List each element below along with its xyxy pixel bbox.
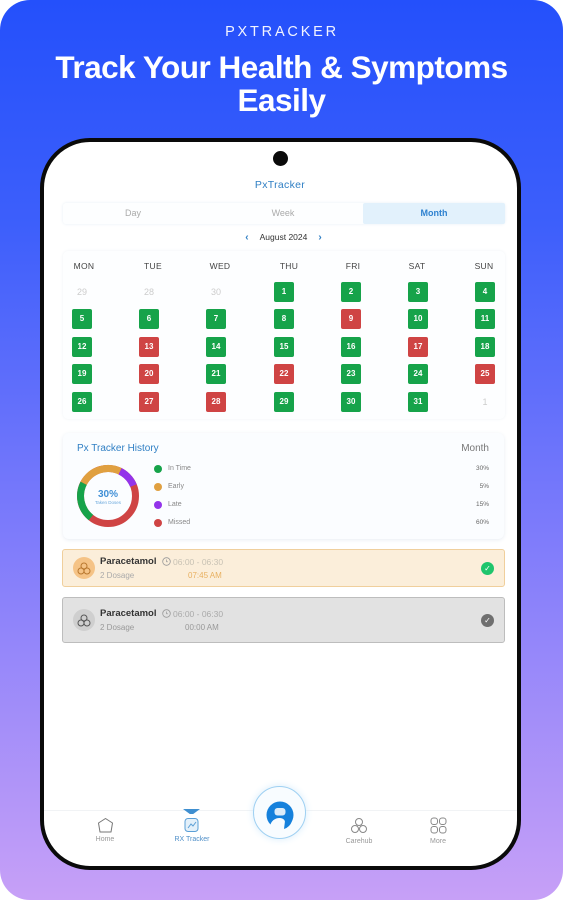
calendar days: 26 xyxy=(78,397,86,406)
nav: assistant button xyxy=(253,786,306,839)
calendar days: 21 xyxy=(212,369,220,378)
robot icon xyxy=(266,802,294,829)
calendar days: 28 xyxy=(144,287,154,297)
active tab highlight xyxy=(363,203,505,224)
calendar days: 25 xyxy=(481,369,489,378)
dosage: 2 Dosage xyxy=(100,623,134,632)
calendar days: 23 xyxy=(347,369,355,378)
legend dot: missed xyxy=(154,519,162,527)
donut chart xyxy=(77,464,139,527)
title xyxy=(55,49,508,118)
SAT: SAT xyxy=(409,261,425,271)
SUN: SUN xyxy=(475,261,493,271)
calendar days: 27 xyxy=(145,397,153,406)
pill icon xyxy=(73,557,95,579)
camera xyxy=(273,151,288,166)
nav label: tracker: RX Tracker xyxy=(174,836,210,843)
calendar days: 16 xyxy=(347,342,355,351)
nav: tracker icon xyxy=(184,818,198,832)
legend dot: in time xyxy=(154,465,162,473)
medication card: taken xyxy=(62,549,505,587)
time: 00:00 AM xyxy=(185,623,219,632)
legend: late: Late xyxy=(168,501,182,508)
check icon: ✓ xyxy=(484,616,491,625)
THU: THU xyxy=(280,261,298,271)
calendar days: 1 xyxy=(282,287,286,296)
history heading: Px Tracker History xyxy=(77,443,159,454)
calendar days xyxy=(72,282,495,412)
calendar days: 5 xyxy=(80,314,84,323)
legend: missed: Missed xyxy=(168,519,190,526)
clock icon xyxy=(162,609,171,618)
title: Easily xyxy=(237,82,326,118)
history panel xyxy=(63,433,504,539)
pill icon xyxy=(73,609,95,631)
check icon: ✓ xyxy=(484,564,491,573)
calendar days: 15 xyxy=(280,342,288,351)
history period: Month xyxy=(461,443,489,454)
medicine name: Paracetamol xyxy=(100,608,157,619)
calendar days: 17 xyxy=(414,342,422,351)
schedule: 06:00 - 06:30 xyxy=(173,557,223,567)
tab: month: Month xyxy=(420,208,448,218)
tablet frame xyxy=(40,138,521,870)
clock icon xyxy=(162,557,171,566)
legend dot: late xyxy=(154,501,162,509)
brand label: PXTRACKER xyxy=(225,24,339,40)
calendar days: 18 xyxy=(481,342,489,351)
calendar panel xyxy=(63,251,505,419)
legend: early: Early xyxy=(168,483,184,490)
month selector: ‹ August 2024 › xyxy=(245,232,322,243)
donut value: 30% xyxy=(98,489,118,500)
calendar days: 7 xyxy=(214,314,218,323)
calendar days: 28 xyxy=(212,397,220,406)
medication card: pending xyxy=(62,597,505,643)
value: in time: 30% xyxy=(476,465,489,472)
calendar days: 20 xyxy=(145,369,153,378)
calendar days: 30 xyxy=(347,397,355,406)
calendar days: 6 xyxy=(147,314,151,323)
calendar days: 8 xyxy=(282,314,286,323)
calendar days: 31 xyxy=(414,397,422,406)
calendar days: 29 xyxy=(77,287,87,297)
nav: tracker indicator xyxy=(183,809,200,814)
value: early: 5% xyxy=(480,483,489,490)
check icon xyxy=(481,614,494,627)
calendar days: 19 xyxy=(78,369,86,378)
app title: PxTracker xyxy=(255,179,305,191)
taken time: 07:45 AM xyxy=(188,571,222,580)
title: Track Your Health & Symptoms xyxy=(55,49,508,85)
tab: week: Week xyxy=(272,208,294,218)
calendar days: 13 xyxy=(145,342,153,351)
calendar days: 11 xyxy=(481,314,489,323)
schedule: 06:00 - 06:30 xyxy=(173,609,223,619)
calendar days: 3 xyxy=(416,287,420,296)
calendar days: 12 xyxy=(78,342,86,351)
legend: in time: In Time xyxy=(168,465,191,472)
calendar days: 1 xyxy=(482,397,488,407)
nav: more icon xyxy=(430,818,446,834)
nav: home xyxy=(98,818,113,832)
nav bar xyxy=(44,810,517,866)
calendar days: 14 xyxy=(212,342,220,351)
nav label: carehub: Carehub xyxy=(346,838,372,845)
TUE: TUE xyxy=(144,261,162,271)
nav: carehub icon xyxy=(351,818,367,833)
tab: day: Day xyxy=(125,208,141,218)
check icon xyxy=(481,562,494,575)
WED: WED xyxy=(210,261,230,271)
nav label: more: More xyxy=(430,838,446,845)
period tabs xyxy=(63,203,505,224)
dosage: 2 Dosage xyxy=(100,571,134,580)
calendar days: 24 xyxy=(414,369,422,378)
value: late: 15% xyxy=(476,501,489,508)
donut caption: Taken Doses xyxy=(95,500,122,505)
nav label: home: Home xyxy=(96,836,114,843)
FRI: FRI xyxy=(346,261,360,271)
calendar days: 29 xyxy=(280,397,288,406)
calendar days: 30 xyxy=(211,287,221,297)
MON: MON xyxy=(74,261,94,271)
calendar days: 9 xyxy=(349,314,353,323)
calendar days: 2 xyxy=(349,287,353,296)
calendar days: 10 xyxy=(414,314,422,323)
value: missed: 60% xyxy=(476,519,489,526)
medicine name: Paracetamol xyxy=(100,556,157,567)
calendar days: 22 xyxy=(280,369,288,378)
legend dot: early xyxy=(154,483,162,491)
calendar days: 4 xyxy=(483,287,487,296)
